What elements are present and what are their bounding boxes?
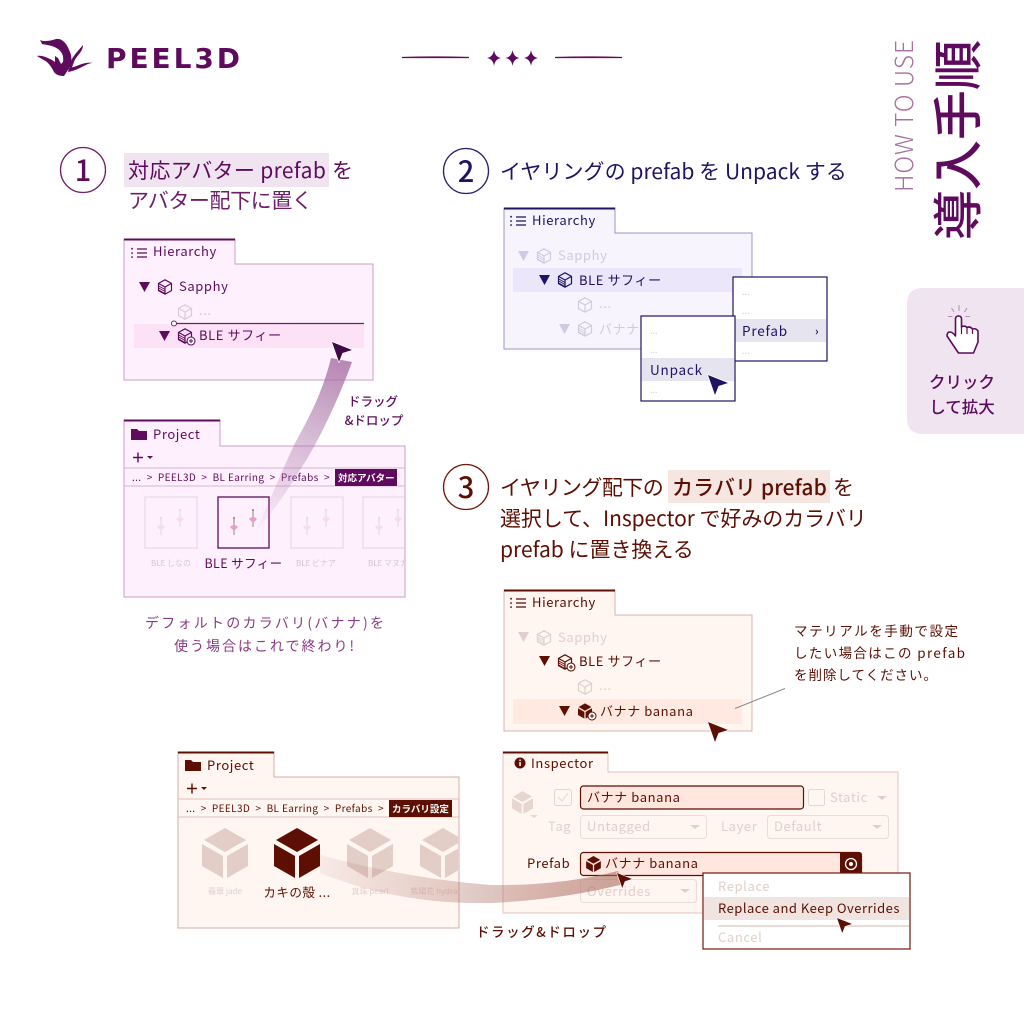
label: drag and drop: &ドロップ: [345, 410, 404, 429]
asset thumbnails: BLE ビナア: [296, 558, 336, 569]
overrides dropdown: [580, 880, 696, 902]
layer dropdown: Default: [774, 816, 822, 835]
heading: 導入手順: 導入手順: [919, 40, 991, 240]
menu: replace: Replace: [718, 876, 770, 895]
arrow: drag from project to hierarchy: [254, 358, 352, 535]
callout leader: [735, 688, 785, 708]
asset thumbnails: [145, 497, 415, 572]
tab title: Inspector: [531, 753, 594, 772]
checkbox: [554, 790, 572, 806]
row: highlighted BLE: [134, 324, 364, 348]
panel: project step 1: [124, 420, 415, 597]
breadcrumb: ... > PEEL3D > BL Earring > Prefabs >: [132, 469, 330, 484]
text: step 1: 対応アバター prefab: [128, 155, 326, 185]
label: drag and drop: ドラッグ&ドロップ: [476, 921, 606, 941]
menu: Unpack: ...: [650, 324, 658, 337]
row: Sapphy: Sapphy: [179, 276, 228, 295]
callout: material note: [794, 620, 965, 684]
menu: Prefab: ...: [742, 285, 750, 298]
tag dropdown: Tag: [548, 816, 571, 835]
icon: pointing hand: [947, 305, 978, 353]
number 1: [60, 148, 106, 192]
breadcrumb: [178, 799, 459, 817]
row: BLE: [539, 651, 662, 671]
panel: inspector: [503, 752, 898, 913]
callout: material note: したい場合はこの prefab: [794, 642, 965, 662]
prefab field: [527, 852, 862, 876]
asset thumbnails: BLE マヌカ: [368, 558, 408, 569]
panel: hierarchy step 1: [124, 239, 373, 380]
static toggle: [808, 787, 887, 806]
row: Sapphy faded: [518, 627, 607, 646]
toolbar: [187, 784, 207, 794]
number 3: 3: [458, 465, 474, 507]
text: step 1: を: [332, 155, 353, 185]
menu: replace: Replace and Keep Overrides: [718, 898, 900, 917]
asset thumbnails: BLE サフィー: [204, 553, 283, 572]
number 2: 2: [458, 149, 474, 191]
overrides dropdown: Overrides: [587, 881, 651, 900]
cursor: inspector: [617, 873, 632, 888]
tag dropdown: [548, 816, 706, 838]
tab title: [131, 424, 200, 443]
text: step 3: を: [833, 472, 854, 502]
callout: material note: を削除してください。: [794, 664, 937, 684]
menu: Unpack: ...: [650, 383, 658, 396]
row: Sapphy: [139, 276, 228, 295]
breadcrumb: 対応アバター: [338, 470, 395, 484]
text: step 3: prefab に置き換える: [500, 534, 694, 564]
panel: project step 3: [178, 752, 476, 928]
heading: HOW TO USE: HOW TO USE: [886, 40, 921, 192]
layer dropdown: [721, 816, 888, 838]
menu: replace: Cancel: [718, 927, 762, 946]
menu: Unpack: ...: [650, 343, 658, 356]
label: drag and drop: [345, 391, 404, 429]
number 2: [444, 148, 488, 194]
text: click label: クリック: [929, 369, 995, 393]
row: BLE: BLE サフィー: [579, 651, 662, 670]
step 3 heading: [444, 464, 867, 564]
row: Sapphy faded: Sapphy: [558, 627, 607, 646]
tab title: Hierarchy: [153, 241, 217, 260]
text: step 3: 選択して、Inspector で好みのカラバリ: [500, 503, 867, 533]
menu: Prefab: ...: [742, 304, 750, 317]
colour cubes: 翡翠 jade: [208, 886, 243, 897]
row: faded: ...: [599, 675, 612, 694]
logo: PEEL3D: [37, 39, 240, 76]
tab title: [185, 755, 254, 774]
field: name: [580, 786, 804, 809]
text: step 1: [128, 155, 353, 215]
menu: Prefab: ›: [815, 323, 819, 339]
ornament: lines and stars: [402, 50, 622, 66]
field: name: バナナ banana: [587, 787, 681, 806]
row: Sapphy faded: [518, 245, 607, 264]
caption: default colour: 使う場合はこれで終わり!: [174, 636, 354, 656]
highlight: [124, 153, 329, 187]
row: faded: ...: [199, 300, 212, 319]
number 1: 1: [75, 148, 91, 190]
panel: hierarchy step 3: [504, 590, 752, 731]
drop indicator: [172, 321, 364, 326]
wordmark: PEEL3D: [106, 42, 240, 75]
row: BLE highlighted: [513, 268, 742, 292]
breadcrumb: ... > PEEL3D > BL Earring > Prefabs >: [186, 800, 384, 815]
toolbar: [133, 452, 153, 462]
callout: material note: マテリアルを手動で設定: [794, 620, 958, 640]
panel: hierarchy step 2: [504, 208, 752, 349]
static toggle: Static: [830, 787, 868, 806]
row: banana faded: [559, 319, 640, 338]
cursor: replace menu: [837, 918, 852, 933]
number 3: [444, 464, 488, 510]
step 2 heading: [444, 148, 847, 194]
text: step 3: [500, 472, 867, 564]
row: faded: [578, 293, 612, 312]
text: step 3: カラバリ prefab: [672, 472, 827, 502]
row: BLE highlighted: BLE サフィー: [579, 270, 662, 289]
row: banana faded: バナナ: [599, 319, 640, 338]
menu: Unpack: [641, 316, 735, 401]
tab title: Hierarchy: [532, 210, 596, 229]
breadcrumb: カラバリ設定: [392, 802, 449, 816]
layer dropdown: Layer: [721, 816, 758, 835]
faded object icon: [512, 791, 538, 818]
prefab field: バナナ banana: [605, 853, 699, 872]
step 1 heading: [60, 148, 353, 215]
caption: default colour: [145, 613, 384, 656]
text: step 3: イヤリング配下の: [500, 472, 664, 502]
label: drag and drop: ドラッグ: [348, 391, 398, 410]
colour cubes: [202, 828, 476, 901]
colour cubes: 真珠 pearl: [352, 886, 388, 897]
panel: click to enlarge: [907, 288, 1024, 434]
colour cubes: カキの殻 ...: [263, 882, 331, 901]
text: step 2: イヤリングの prefab を Unpack する: [500, 156, 847, 186]
row: banana highlighted: バナナ banana: [600, 701, 694, 720]
menu: Unpack: Unpack: [650, 359, 703, 379]
caption: default colour: デフォルトのカラバリ(バナナ)を: [145, 613, 384, 633]
row: faded: [578, 675, 612, 694]
tab title: Project: [207, 755, 254, 774]
tag dropdown: Untagged: [587, 816, 651, 835]
tab title: Project: [153, 424, 200, 443]
icon: octopus: [37, 39, 93, 76]
cursor: hierarchy step 3: [708, 722, 728, 742]
text: click label: して拡大: [929, 394, 995, 418]
menu: replace: [703, 873, 910, 949]
breadcrumb: [124, 468, 405, 486]
row: Sapphy faded: Sapphy: [558, 245, 607, 264]
arrow: drag from project to inspector: [320, 855, 624, 903]
row: faded: [178, 300, 212, 319]
menu: Prefab: ...: [742, 344, 750, 357]
highlight: [668, 470, 830, 503]
prefab field: Prefab: [527, 853, 570, 872]
text: step 1: アバター配下に置く: [128, 185, 313, 215]
colour cubes: 紫陽花 hydrangea: [410, 886, 476, 897]
menu: Prefab: [733, 277, 827, 361]
cursor: step 2: [708, 375, 728, 395]
text: click label: [929, 369, 995, 418]
tab title: Hierarchy: [532, 592, 596, 611]
cursor: step 1: [332, 342, 352, 362]
row: highlighted BLE: BLE サフィー: [199, 325, 282, 344]
row: faded: ...: [599, 293, 612, 312]
row: banana highlighted: [513, 699, 742, 724]
menu: Prefab: Prefab: [742, 320, 788, 340]
asset thumbnails: BLE しなの: [151, 558, 191, 569]
